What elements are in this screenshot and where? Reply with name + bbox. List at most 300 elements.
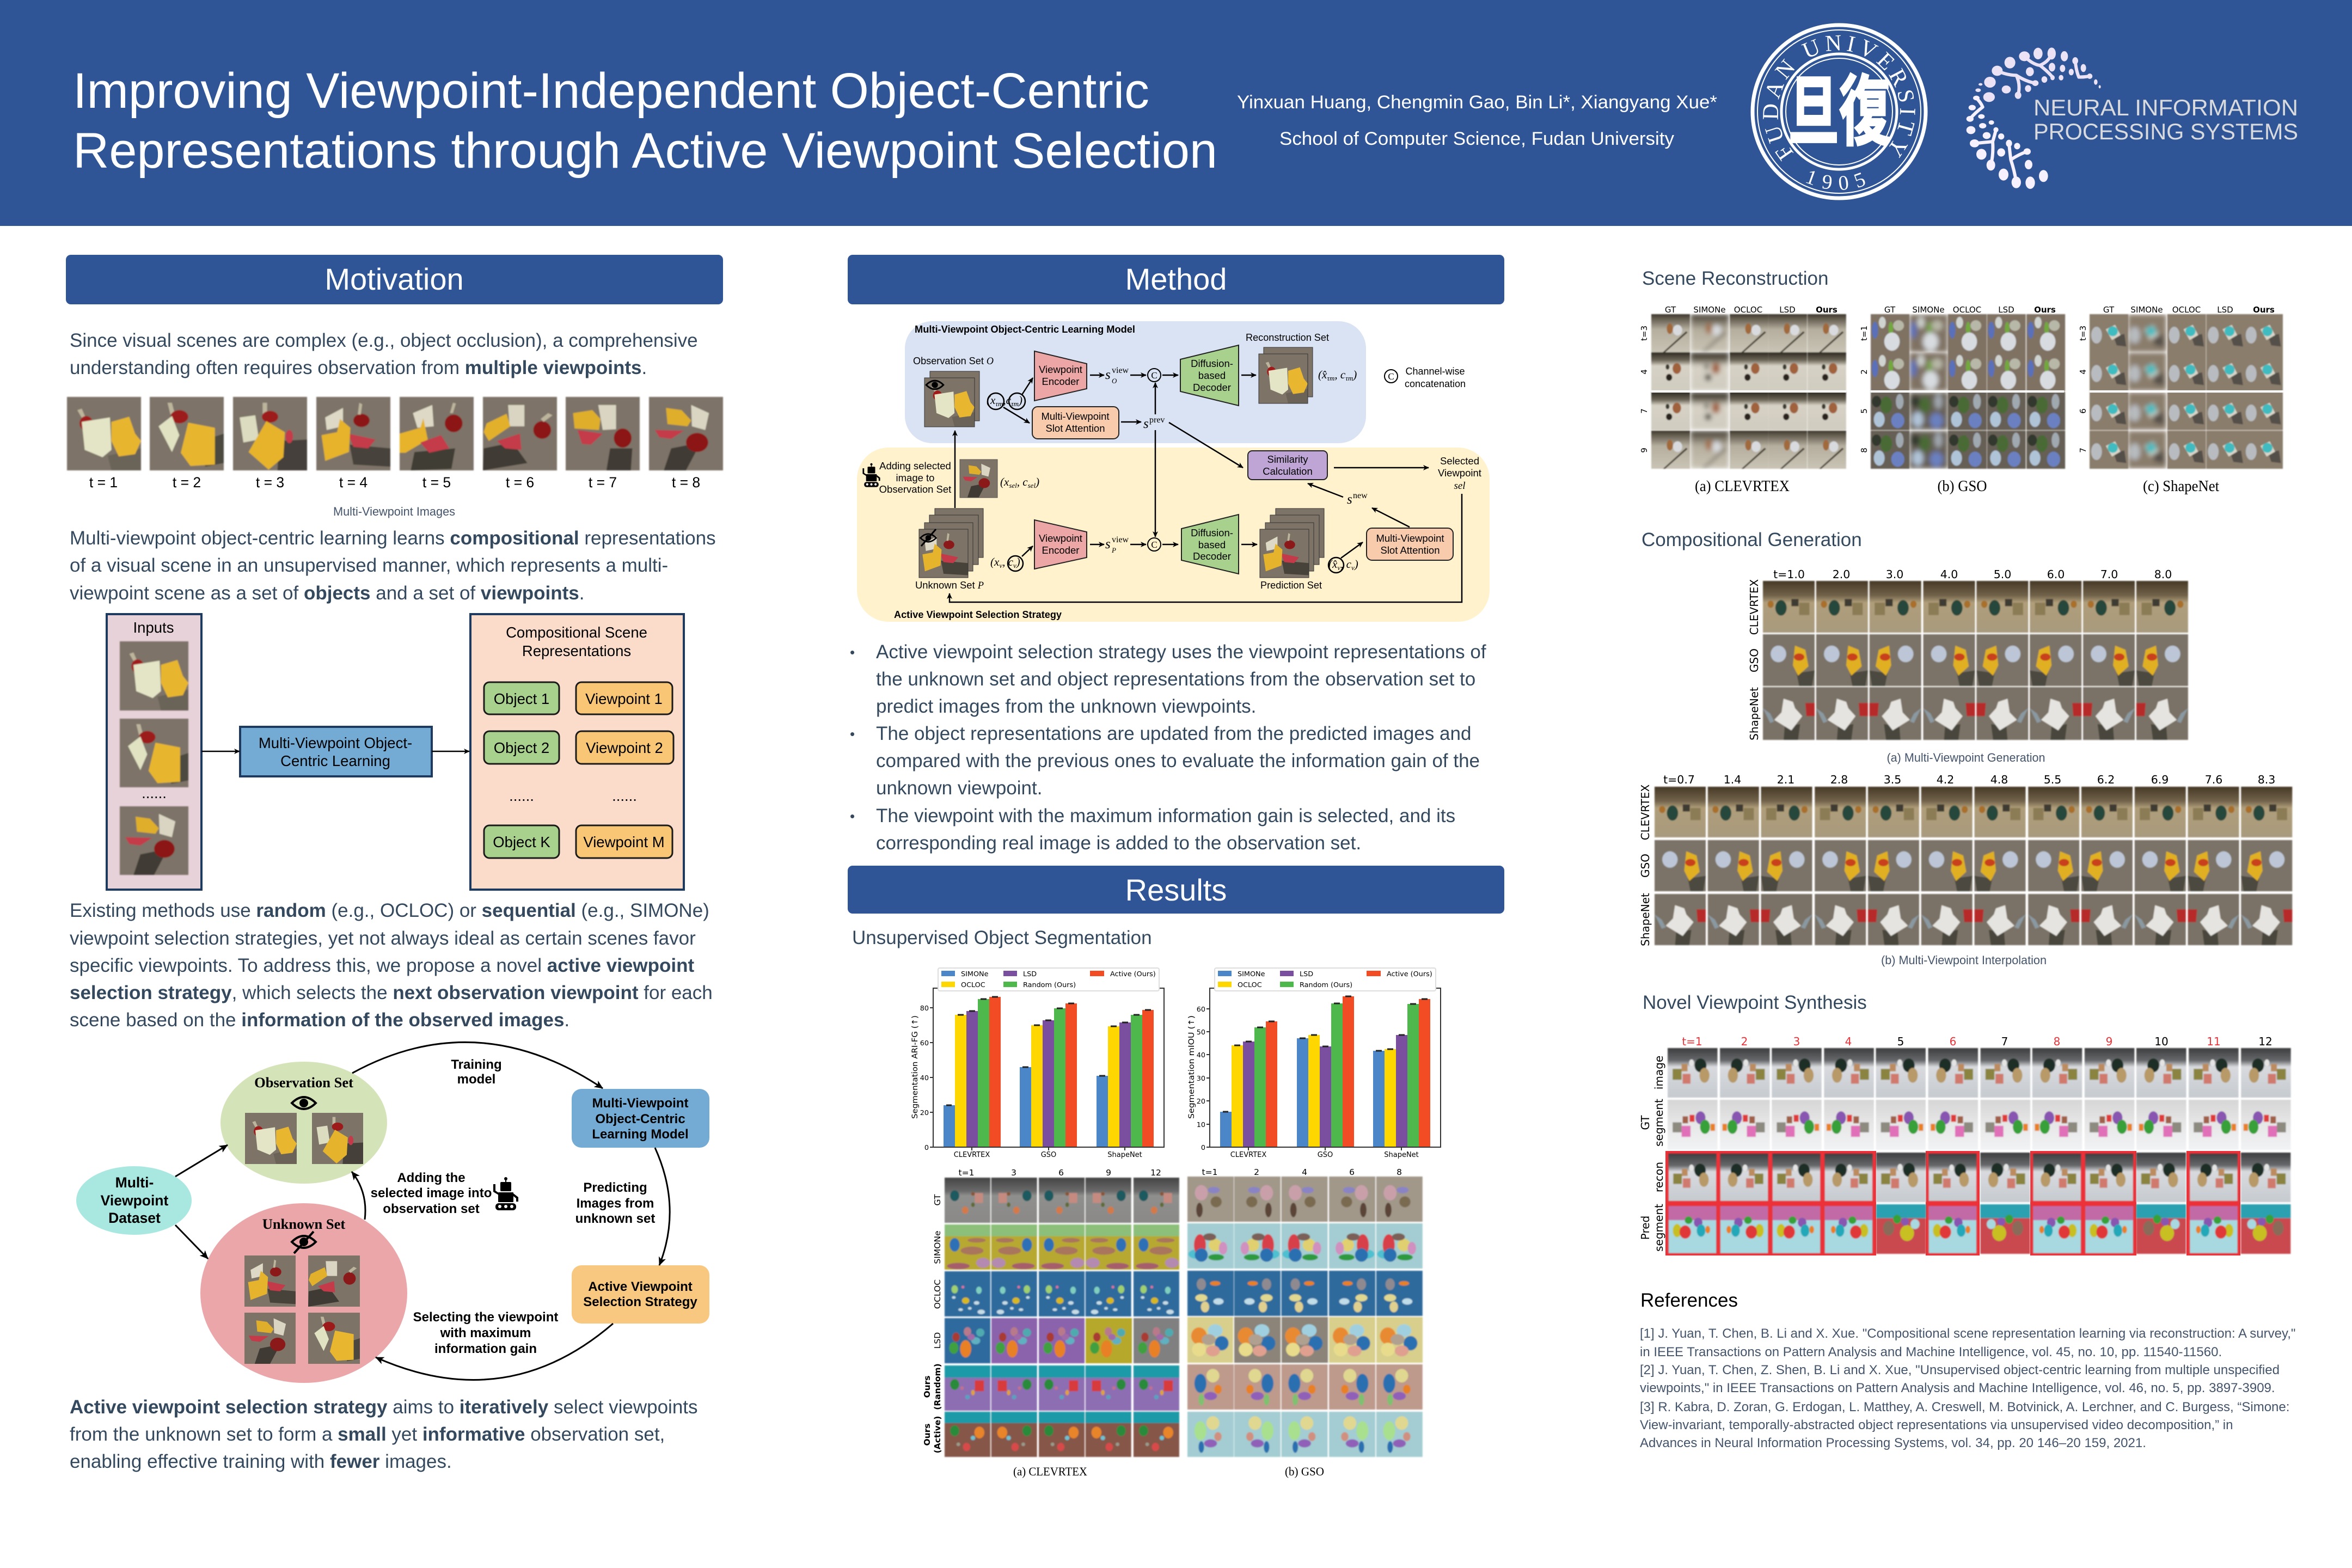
image stack: prediction set bbox=[1260, 509, 1324, 591]
bar chart: ARI-FG: CLEVRTEX bbox=[954, 1151, 990, 1159]
legend: ARI-FG: SIMONe bbox=[961, 970, 989, 978]
block: diffusion decoder 2: based bbox=[1198, 539, 1226, 550]
panel: compositional scene representations: Viewpoint 1 bbox=[585, 690, 663, 707]
legend: ARI-FG: OCLOC bbox=[961, 981, 985, 989]
symbol: s prev: prev bbox=[1149, 415, 1165, 425]
bar chart: ARI-FG: GSO bbox=[1041, 1151, 1056, 1159]
logo: NeurIPS dots bbox=[1967, 47, 2101, 189]
bar chart: mIOU: 60 bbox=[1197, 1006, 1205, 1014]
image grid: CLEVRTEX segmentation: OCLOC bbox=[933, 1279, 942, 1309]
block: viewpoint encoder 2: Viewpoint bbox=[1039, 532, 1082, 544]
logo: Fudan University seal bbox=[1751, 23, 1927, 200]
block: slot attention 2 bbox=[1367, 528, 1453, 560]
node: multi-viewpoint dataset bbox=[76, 1166, 192, 1235]
image grid: reconstruction: t=3 bbox=[2078, 326, 2088, 341]
block: slot attention: Multi-Viewpoint bbox=[1041, 411, 1110, 422]
image grid: reconstruction: SIMONe bbox=[1912, 305, 1945, 315]
image grid: CLEVRTEX segmentation: 3 bbox=[1011, 1168, 1016, 1178]
block: viewpoint encoder bbox=[1034, 351, 1087, 401]
text block: method bullets: The viewpoint with the maximum information gain is selected, and its bbox=[876, 805, 1455, 826]
arrows: pipeline bbox=[950, 375, 1462, 602]
label: adding selected image: Observation Set bbox=[879, 483, 951, 495]
block: slot attention 2: Multi-Viewpoint bbox=[1376, 532, 1444, 544]
text block: references: [3] R. Kabra, D. Zoran, G. Erdogan, L. Matthey, A. Creswell, M. Botvinick, A. Lerchner, and C. Burgess, “Simone: bbox=[1640, 1400, 2289, 1414]
inputs: x and c tokens bbox=[987, 393, 1025, 409]
image grid: multi-viewpoint generation: 5.0 bbox=[1994, 568, 2011, 581]
panel: inputs: ...... bbox=[142, 785, 167, 801]
image grid: novel viewpoint synthesis: recon bbox=[1652, 1162, 1665, 1192]
logo text: NeurIPS: NEURAL INFORMATION bbox=[2033, 95, 2298, 120]
image grid: CLEVRTEX segmentation: GT bbox=[933, 1194, 942, 1205]
symbol: concat 2: C bbox=[1151, 540, 1157, 550]
logo: Fudan University seal: FUDAN UNIVERSITY bbox=[1763, 35, 1915, 161]
image grid: reconstruction: SIMONe bbox=[1693, 305, 1726, 315]
block: diffusion decoder bbox=[1180, 345, 1239, 406]
image grid: reconstruction: LSD bbox=[2217, 305, 2233, 315]
image grid: CLEVRTEX segmentation: LSD bbox=[933, 1332, 942, 1349]
bar chart: ARI-FG: ShapeNet bbox=[1107, 1151, 1142, 1159]
text block: multi-viewpoint learning: of a visual scene in an unsupervised manner, which represents a multi- bbox=[70, 555, 668, 576]
block: viewpoint encoder: Encoder bbox=[1042, 376, 1079, 387]
image grid: CLEVRTEX segmentation bbox=[922, 1168, 1179, 1478]
affiliation: School of Computer Science, Fudan University bbox=[1279, 128, 1674, 149]
image grid: CLEVRTEX segmentation: 9 bbox=[1106, 1168, 1111, 1178]
text block: references: Advances in Neural Information Processing Systems, vol. 34, pp. 20 146–20 159, 2021. bbox=[1640, 1436, 2146, 1450]
panel: right column bbox=[1639, 268, 2295, 1450]
image grid: reconstruction: OCLOC bbox=[1734, 305, 1762, 315]
block: viewpoint encoder: Viewpoint bbox=[1039, 364, 1082, 375]
panel: compositional scene representations: Compositional Scene bbox=[506, 624, 647, 641]
symbol: s prev: s bbox=[1143, 416, 1149, 431]
legend: ARI-FG: Active (Ours) bbox=[1110, 970, 1156, 978]
timestep labels: t = 3 bbox=[256, 474, 284, 491]
bar chart: mIOU bbox=[1187, 988, 1441, 1159]
image grid: novel viewpoint synthesis: GT bbox=[1639, 1115, 1652, 1130]
panel: Results bbox=[848, 866, 1504, 1478]
bar chart: mIOU: CLEVRTEX bbox=[1230, 1151, 1266, 1159]
header banner bbox=[0, 0, 2352, 226]
text block: multi-viewpoint learning: Multi-viewpoint object-centric learning learns compositional representations bbox=[70, 528, 716, 549]
image grid: multi-viewpoint interpolation: (b) Multi-Viewpoint Interpolation bbox=[1881, 953, 2047, 967]
block: similarity calculation: Similarity bbox=[1267, 454, 1308, 465]
inputs: x and c tokens: , bbox=[1003, 394, 1006, 407]
image grid: multi-viewpoint generation: 7.0 bbox=[2100, 568, 2118, 581]
timestep labels: t = 1 bbox=[89, 474, 118, 491]
legend: channel-wise concatenation: concatenation bbox=[1405, 378, 1466, 389]
label: adding selected image bbox=[879, 460, 951, 495]
box: learning model bbox=[572, 1089, 709, 1148]
text block: method bullets: predict images from the unknown viewpoints. bbox=[876, 696, 1256, 717]
block: diffusion decoder 2 bbox=[1181, 514, 1239, 574]
node: observation set bbox=[220, 1062, 387, 1184]
image grid: reconstruction: Ours bbox=[1816, 305, 1837, 315]
text block: strategy summary: from the unknown set to form a small yet informative observation set, bbox=[70, 1424, 665, 1445]
text block: multi-viewpoint learning: viewpoint scene as a set of objects and a set of viewpoints. bbox=[70, 583, 585, 604]
image grid: reconstruction: 2 bbox=[1859, 369, 1869, 375]
image grid: reconstruction: (b) GSO bbox=[1937, 478, 1987, 495]
image stack: unknown set bbox=[915, 509, 984, 591]
symbol: s view P: view bbox=[1112, 535, 1129, 544]
image grid: multi-viewpoint generation: (a) Multi-Viewpoint Generation bbox=[1887, 751, 2045, 764]
image stack: reconstruction set: Reconstruction Set bbox=[1246, 332, 1329, 343]
label: adding selected image: selected image into bbox=[371, 1186, 492, 1200]
label: adding selected image: observation set bbox=[383, 1202, 480, 1216]
image grid: reconstruction: t=3 bbox=[1639, 326, 1649, 341]
symbol: concat bbox=[1148, 369, 1161, 382]
image grid: multi-viewpoint interpolation: 4.8 bbox=[1990, 773, 2008, 786]
text block: strategy summary: Active viewpoint selection strategy aims to iteratively select viewpoints bbox=[70, 1396, 698, 1418]
heading: learning model: Multi-Viewpoint Object-Centric Learning Model bbox=[915, 323, 1135, 335]
image grid: novel viewpoint synthesis: 2 bbox=[1741, 1035, 1748, 1048]
icon: robot bbox=[862, 463, 880, 487]
timestep labels: t = 8 bbox=[672, 474, 700, 491]
block: similarity calculation: Calculation bbox=[1263, 465, 1313, 477]
label: adding selected image bbox=[371, 1171, 492, 1216]
symbol: concat: C bbox=[1151, 370, 1157, 381]
image stack: reconstruction set bbox=[1246, 332, 1329, 403]
bar chart: mIOU: 0 bbox=[1201, 1144, 1205, 1152]
text block: intro: understanding often requires observation from multiple viewpoints. bbox=[70, 357, 647, 378]
text block: method bullets: The object representations are updated from the predicted images and bbox=[876, 723, 1471, 744]
block: similarity calculation bbox=[1248, 451, 1327, 480]
image grid: novel viewpoint synthesis: segment bbox=[1652, 1099, 1665, 1147]
image grid: reconstruction: OCLOC bbox=[2172, 305, 2201, 315]
symbol: s view O: s bbox=[1105, 367, 1111, 382]
image grid: novel viewpoint synthesis: t=1 bbox=[1682, 1035, 1702, 1048]
panel: compositional scene representations bbox=[470, 614, 684, 890]
image grid: novel viewpoint synthesis: 7 bbox=[2001, 1035, 2008, 1048]
image grid: multi-viewpoint interpolation: t=0.7 bbox=[1663, 773, 1695, 786]
label: adding selected image: Adding the bbox=[397, 1171, 465, 1185]
text block: existing methods: Existing methods use random (e.g., OCLOC) or sequential (e.g., SIMONe) bbox=[70, 900, 709, 921]
authors: Yinxuan Huang, Chengmin Gao, Bin Li*, Xiangyang Xue* bbox=[1237, 92, 1717, 113]
panel: Method bbox=[848, 255, 1504, 854]
legend: ARI-FG: Random (Ours) bbox=[1023, 981, 1076, 989]
heading: Motivation: Motivation bbox=[324, 262, 464, 296]
image stack: observation set: Observation Set O bbox=[913, 355, 994, 367]
block: slot attention: Slot Attention bbox=[1045, 422, 1105, 434]
image grid: reconstruction: t=1 bbox=[1859, 326, 1869, 341]
block: diffusion decoder 2: Decoder bbox=[1193, 550, 1231, 562]
label: predicted pair bbox=[1328, 558, 1358, 573]
inputs: x and c tokens: τm bbox=[1011, 400, 1019, 408]
logo: Fudan University seal: 旦復 bbox=[1788, 50, 1890, 161]
node: unknown set: Unknown Set bbox=[262, 1216, 345, 1232]
bar chart: mIOU: 30 bbox=[1197, 1075, 1205, 1083]
heading: compositional generation: Compositional Generation bbox=[1641, 529, 1862, 550]
label: sel pair: , c bbox=[1017, 475, 1028, 488]
image grid: multi-viewpoint interpolation: ShapeNet bbox=[1639, 893, 1652, 946]
bar chart: ARI-FG: 80 bbox=[920, 1004, 929, 1013]
box: learning model: Learning Model bbox=[592, 1127, 689, 1142]
subheading: unsupervised object segmentation: Unsupervised Object Segmentation bbox=[852, 927, 1152, 948]
symbol: s new bbox=[1347, 491, 1368, 507]
image grid: multi-viewpoint interpolation bbox=[1639, 773, 2292, 967]
bar chart: ARI-FG: Segmentation ARI-FG (↑) bbox=[911, 1015, 920, 1119]
image grid: multi-viewpoint generation: 2.0 bbox=[1833, 568, 1850, 581]
legend: mIOU: LSD bbox=[1300, 970, 1313, 978]
label: selecting viewpoint: information gain bbox=[434, 1342, 537, 1356]
image: selected bbox=[960, 460, 997, 498]
bar chart: mIOU: ShapeNet bbox=[1384, 1151, 1419, 1159]
panel: compositional scene representations: Object 1 bbox=[494, 690, 549, 707]
timestep labels: t = 5 bbox=[422, 474, 451, 491]
image grid: novel viewpoint synthesis: image bbox=[1652, 1056, 1665, 1089]
inputs: x and c tokens: c bbox=[1006, 394, 1011, 407]
label: selected viewpoint: sel bbox=[1454, 480, 1466, 492]
label: predicted pair: v bbox=[1337, 564, 1340, 572]
panel: compositional scene representations: Viewpoint M bbox=[583, 834, 665, 850]
block: slot attention bbox=[1032, 407, 1119, 439]
image grid: reconstruction: 6 bbox=[2078, 408, 2088, 414]
text block: intro: Since visual scenes are complex (e.g., object occlusion), a comprehensive bbox=[70, 330, 698, 351]
image grid: reconstruction: Ours bbox=[2253, 305, 2275, 315]
image grid: reconstruction: 9 bbox=[1639, 448, 1649, 453]
text block: references: View-invariant, temporally-abstracted object representations via unsupervised video decomposition,” in bbox=[1640, 1418, 2233, 1432]
heading: Motivation bbox=[66, 255, 723, 304]
inputs: x and c tokens: ) bbox=[1018, 394, 1022, 407]
bar chart: ARI-FG bbox=[911, 988, 1164, 1159]
symbol: s view P: s bbox=[1105, 537, 1111, 552]
text block: method bullets: Active viewpoint selection strategy uses the viewpoint representations of bbox=[876, 641, 1486, 663]
legend: channel-wise concatenation: Channel-wise bbox=[1405, 366, 1465, 377]
inputs: x and c for unknown: v bbox=[1013, 561, 1016, 569]
logo: Fudan University seal: 1905 bbox=[1806, 171, 1865, 190]
panel: inputs bbox=[107, 614, 201, 890]
image grid: novel viewpoint synthesis: 9 bbox=[2106, 1035, 2112, 1048]
image grid: reconstruction: 8 bbox=[1859, 448, 1869, 453]
inputs: x and c tokens: (x bbox=[987, 394, 995, 407]
image grid: reconstruction: OCLOC bbox=[1953, 305, 1981, 315]
inputs: x and c for unknown: v bbox=[999, 561, 1002, 569]
diagram: compositional representation bbox=[107, 614, 684, 890]
label: adding selected image: Adding selected bbox=[879, 460, 951, 471]
block: diffusion decoder: based bbox=[1198, 370, 1226, 381]
block: viewpoint encoder 2: Encoder bbox=[1042, 544, 1079, 556]
icon: robot bbox=[493, 1177, 518, 1210]
image grid: CLEVRTEX segmentation: (Active) bbox=[933, 1416, 942, 1453]
label: training model bbox=[451, 1057, 502, 1087]
image grid: novel viewpoint synthesis: 3 bbox=[1793, 1035, 1800, 1048]
image grid: reconstruction: (c) ShapeNet bbox=[2143, 478, 2219, 495]
node: multi-viewpoint dataset: Dataset bbox=[108, 1210, 161, 1226]
label: predicted pair: v bbox=[1351, 564, 1355, 572]
image grid: reconstruction: GT bbox=[1884, 305, 1896, 315]
image grid: GSO segmentation: (b) GSO bbox=[1285, 1465, 1324, 1478]
image grid: multi-viewpoint interpolation: 5.5 bbox=[2044, 773, 2061, 786]
text block: method bullets: • bbox=[850, 808, 855, 824]
heading: strategy: Active Viewpoint Selection Strategy bbox=[894, 609, 1062, 620]
label: predicted pair: , c bbox=[1340, 558, 1352, 571]
panel: compositional scene representations: Viewpoint 2 bbox=[586, 739, 663, 756]
image grid: novel viewpoint synthesis: 6 bbox=[1950, 1035, 1956, 1048]
symbol: s view P: P bbox=[1111, 546, 1116, 554]
bar chart: mIOU: 40 bbox=[1197, 1051, 1205, 1059]
arrows: cycle bbox=[175, 1042, 670, 1380]
label: sel pair: (x bbox=[1000, 475, 1009, 488]
label: reconstructed pair: (x̂ bbox=[1318, 368, 1327, 381]
image grid: novel viewpoint synthesis: segment bbox=[1652, 1204, 1665, 1252]
label: selected viewpoint: Viewpoint bbox=[1438, 467, 1481, 479]
heading: references: References bbox=[1640, 1290, 1738, 1311]
image grid: novel viewpoint synthesis: 5 bbox=[1897, 1035, 1904, 1048]
text block: method bullets: corresponding real image is added to the observation set. bbox=[876, 832, 1361, 854]
image grid: CLEVRTEX segmentation: (a) CLEVRTEX bbox=[1013, 1465, 1087, 1478]
image grid: multi-viewpoint generation: GSO bbox=[1748, 648, 1761, 672]
image stack: prediction set: Prediction Set bbox=[1260, 579, 1322, 591]
label: predicting images: Images from bbox=[577, 1196, 654, 1211]
text block: method bullets bbox=[850, 641, 1486, 854]
image grid: multi-viewpoint generation: 3.0 bbox=[1886, 568, 1903, 581]
label: predicting images: Predicting bbox=[583, 1180, 647, 1195]
node: multi-viewpoint dataset: Multi- bbox=[115, 1174, 154, 1191]
node: multi-viewpoint dataset: Viewpoint bbox=[101, 1192, 168, 1209]
image grid: CLEVRTEX segmentation: 6 bbox=[1058, 1168, 1064, 1178]
text block: method bullets: • bbox=[850, 726, 855, 742]
timestep labels: t = 2 bbox=[173, 474, 201, 491]
image grid: CLEVRTEX segmentation: 12 bbox=[1150, 1168, 1161, 1178]
text block: references: [2] J. Yuan, T. Chen, Z. Shen, B. Li and X. Xue, "Unsupervised object-centric learning from multiple unspecified bbox=[1640, 1363, 2280, 1377]
image grid: reconstruction: 7 bbox=[2078, 448, 2088, 453]
symbol: s view O: O bbox=[1112, 377, 1117, 385]
image stack: unknown set: Unknown Set P bbox=[915, 579, 984, 591]
image grid: reconstruction: LSD bbox=[1998, 305, 2014, 315]
image grid: multi-viewpoint interpolation: 2.8 bbox=[1830, 773, 1848, 786]
image grid: GSO segmentation: 6 bbox=[1349, 1167, 1355, 1177]
inputs: x and c for unknown bbox=[990, 555, 1023, 571]
title: Representations through Active Viewpoint Selection bbox=[73, 123, 1217, 179]
bar chart: ARI-FG: 40 bbox=[920, 1074, 929, 1082]
box: multi-viewpoint object-centric learning: Multi-Viewpoint Object- bbox=[259, 734, 412, 751]
bar chart: mIOU: GSO bbox=[1318, 1151, 1333, 1159]
symbol: s view P bbox=[1105, 535, 1129, 554]
text block: strategy summary: enabling effective training with fewer images. bbox=[70, 1451, 452, 1472]
bar chart: mIOU: 20 bbox=[1197, 1098, 1205, 1106]
image grid: novel viewpoint synthesis: Pred bbox=[1639, 1216, 1652, 1240]
heading: Results bbox=[848, 866, 1504, 914]
bar chart: ARI-FG: 0 bbox=[924, 1144, 929, 1152]
text block: references: in IEEE Transactions on Pattern Analysis and Machine Intelligence, vol. 45, no. 10, pp. 11540-11560. bbox=[1640, 1345, 2222, 1359]
bar chart: ARI-FG: 20 bbox=[920, 1109, 929, 1117]
text block: references: [1] J. Yuan, T. Chen, B. Li and X. Xue. "Compositional scene representation learning via reconstruction: A survey," bbox=[1640, 1326, 2295, 1341]
box: selection strategy: Selection Strategy bbox=[583, 1295, 697, 1309]
timestep labels: t = 7 bbox=[589, 474, 617, 491]
node: observation set: Observation Set bbox=[254, 1074, 353, 1091]
panel: compositional scene representations: ...... bbox=[509, 787, 534, 804]
logo text: NeurIPS: PROCESSING SYSTEMS bbox=[2033, 119, 2298, 144]
node: unknown set bbox=[200, 1203, 407, 1383]
image grid: multi-viewpoint generation bbox=[1748, 568, 2188, 764]
legend: ARI-FG bbox=[938, 968, 1159, 991]
text block: existing methods: specific viewpoints. To address this, we propose a novel active viewpoint bbox=[70, 955, 694, 976]
image grid: GSO segmentation: 4 bbox=[1302, 1167, 1307, 1177]
image grid: multi-viewpoint interpolation: 8.3 bbox=[2258, 773, 2275, 786]
label: reconstructed pair: ) bbox=[1352, 368, 1357, 381]
text block: existing methods: viewpoint selection strategies, yet not always ideal as certain scenes favor bbox=[70, 928, 696, 949]
text block: method bullets: the unknown set and object representations from the observation set to bbox=[876, 669, 1475, 690]
label: training model: model bbox=[457, 1072, 495, 1087]
panel: inputs: Inputs bbox=[133, 619, 174, 636]
legend: ARI-FG: LSD bbox=[1023, 970, 1037, 978]
label: selecting viewpoint: with maximum bbox=[440, 1326, 531, 1340]
inputs: x and c for unknown: , c bbox=[1002, 555, 1014, 568]
image grid: CLEVRTEX segmentation: t=1 bbox=[959, 1168, 974, 1178]
block: viewpoint encoder 2 bbox=[1034, 520, 1087, 569]
image grid: multi-viewpoint generation: 8.0 bbox=[2154, 568, 2172, 581]
image grid: multi-viewpoint interpolation: 4.2 bbox=[1937, 773, 1954, 786]
block: diffusion decoder: Decoder bbox=[1193, 382, 1231, 393]
arrow: learning to representations bbox=[432, 751, 469, 752]
image grid: reconstruction: LSD bbox=[1779, 305, 1796, 315]
label: reconstructed pair: τm bbox=[1345, 374, 1353, 382]
timestep labels bbox=[89, 474, 700, 491]
block: slot attention 2: Slot Attention bbox=[1380, 544, 1440, 556]
image grid: multi-viewpoint interpolation: 6.9 bbox=[2151, 773, 2169, 786]
image grid: multi-viewpoint interpolation: CLEVRTEX bbox=[1639, 784, 1652, 840]
image grid: GSO segmentation: t=1 bbox=[1202, 1167, 1217, 1177]
panel: compositional scene representations: Object 2 bbox=[494, 739, 549, 756]
title bbox=[73, 63, 1217, 179]
arrow: inputs to learning bbox=[201, 751, 240, 752]
symbol: s new: s bbox=[1347, 492, 1352, 507]
text block: method bullets: unknown viewpoint. bbox=[876, 777, 1042, 799]
image grid: multi-viewpoint generation: t=1.0 bbox=[1773, 568, 1805, 581]
label: predicted pair: ) bbox=[1354, 558, 1358, 571]
label: predicted pair: (x̂ bbox=[1328, 558, 1337, 571]
image grid: novel viewpoint synthesis: 10 bbox=[2154, 1035, 2169, 1048]
legend: channel-wise concatenation bbox=[1385, 366, 1466, 389]
bar chart: mIOU: 50 bbox=[1197, 1028, 1205, 1037]
image grid: multi-viewpoint interpolation: 3.5 bbox=[1884, 773, 1901, 786]
label: selecting viewpoint: Selecting the viewpoint bbox=[413, 1310, 558, 1325]
heading: novel viewpoint synthesis: Novel Viewpoint Synthesis bbox=[1643, 992, 1867, 1013]
image grid: novel viewpoint synthesis: 8 bbox=[2054, 1035, 2060, 1048]
box: multi-viewpoint object-centric learning: Centric Learning bbox=[280, 752, 390, 769]
image grid: reconstruction: GT bbox=[1665, 305, 1676, 315]
image grid: reconstruction: 7 bbox=[1639, 408, 1649, 414]
label: predicting images bbox=[575, 1180, 655, 1226]
image grid: CLEVRTEX segmentation: SIMONe bbox=[933, 1230, 942, 1264]
symbol: s new: new bbox=[1353, 491, 1368, 500]
block: diffusion decoder: Diffusion- bbox=[1191, 358, 1233, 369]
heading: scene reconstruction: Scene Reconstruction bbox=[1642, 268, 1828, 289]
image grid: reconstruction: 4 bbox=[1639, 369, 1649, 375]
panel: Motivation bbox=[66, 255, 723, 1472]
legend: mIOU: Active (Ours) bbox=[1387, 970, 1432, 978]
image grid: novel viewpoint synthesis: 11 bbox=[2207, 1035, 2221, 1048]
panel: active viewpoint selection strategy bbox=[857, 448, 1490, 622]
label: sel pair: sel bbox=[1009, 481, 1017, 489]
text block: references: viewpoints," in IEEE Transactions on Pattern Analysis and Machine Intelligence, vol. 46, no. 5, pp. 3897-3909. bbox=[1640, 1381, 2275, 1395]
heading: Results: Results bbox=[1125, 873, 1227, 907]
image grid: GSO segmentation: 2 bbox=[1254, 1167, 1259, 1177]
image grid: novel viewpoint synthesis: 12 bbox=[2258, 1035, 2273, 1048]
logo text: NeurIPS bbox=[2033, 95, 2298, 144]
label: selected viewpoint: Selected bbox=[1440, 455, 1479, 467]
label: predicting images: unknown set bbox=[575, 1211, 655, 1226]
legend: mIOU: OCLOC bbox=[1238, 981, 1262, 989]
text block: method bullets: compared with the previous ones to evaluate the information gain of the bbox=[876, 750, 1480, 771]
image grid: multi-viewpoint interpolation: 6.2 bbox=[2097, 773, 2115, 786]
image grid: GSO segmentation bbox=[1187, 1167, 1423, 1478]
label: selecting viewpoint bbox=[413, 1310, 558, 1356]
image grid: multi-viewpoint generation: ShapeNet bbox=[1748, 687, 1761, 740]
panel: compositional scene representations: Object K bbox=[493, 834, 550, 850]
box: multi-viewpoint object-centric learning bbox=[240, 727, 432, 776]
inputs: x and c tokens: τm bbox=[995, 400, 1003, 408]
diagram: method pipeline bbox=[857, 321, 1490, 622]
box: selection strategy: Active Viewpoint bbox=[588, 1279, 693, 1294]
